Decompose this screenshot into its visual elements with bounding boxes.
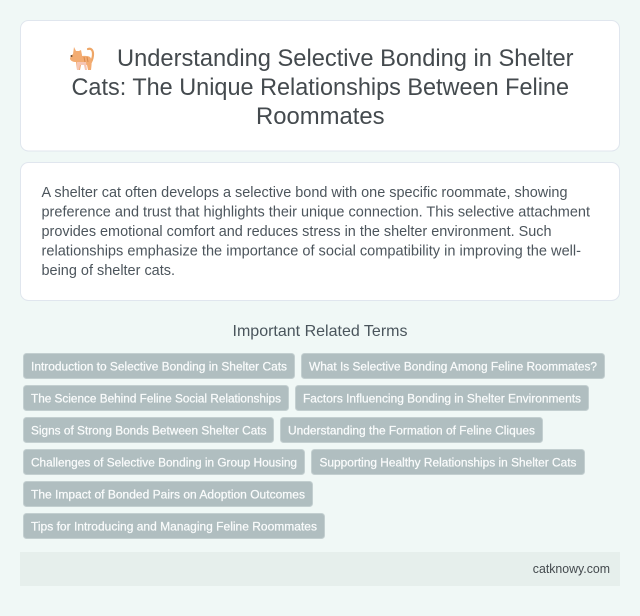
tag: Supporting Healthy Relationships in Shelter Cats xyxy=(320,456,576,470)
panel: summary card xyxy=(20,162,620,300)
tag: Understanding the Formation of Feline Cliques xyxy=(288,424,535,438)
tag: Factors Influencing Bonding in Shelter Environments xyxy=(303,392,581,406)
title text: Roommates xyxy=(256,103,384,130)
heading: related terms: Important Related Terms xyxy=(232,323,408,340)
icon: cat xyxy=(70,47,93,70)
tag xyxy=(24,418,274,442)
tag: What Is Selective Bonding Among Feline Roommates? xyxy=(309,360,597,374)
tag: The Impact of Bonded Pairs on Adoption Outcomes xyxy=(31,488,305,502)
tag xyxy=(296,386,588,410)
panel: title card xyxy=(20,20,620,151)
summary paragraph: A shelter cat often develops a selective bond with one specific roommate, showing xyxy=(42,185,568,201)
tag xyxy=(280,418,542,442)
summary paragraph: being of shelter cats. xyxy=(42,263,175,279)
tag xyxy=(24,450,304,474)
tag xyxy=(24,482,312,506)
title text: Understanding Selective Bonding in Shelter xyxy=(117,45,574,72)
tag xyxy=(312,450,584,474)
tag xyxy=(302,354,604,378)
title text: Cats: The Unique Relationships Between Feline xyxy=(72,74,569,101)
tag: Introduction to Selective Bonding in Shelter Cats xyxy=(31,360,287,374)
tag list xyxy=(24,354,604,538)
tag: The Science Behind Feline Social Relationships xyxy=(31,392,281,406)
summary paragraph xyxy=(42,185,590,279)
tag xyxy=(24,514,324,538)
summary paragraph: relationships emphasize the importance of social compatibility in improving the well- xyxy=(42,244,581,260)
title text xyxy=(72,45,574,130)
tag: Signs of Strong Bonds Between Shelter Cats xyxy=(31,424,266,438)
tag xyxy=(24,386,288,410)
tag: Challenges of Selective Bonding in Group Housing xyxy=(31,456,297,470)
summary paragraph: preference and trust that highlights their unique connection. This selective attachment xyxy=(42,204,590,220)
tag: Tips for Introducing and Managing Feline Roommates xyxy=(31,520,317,534)
summary paragraph: provides emotional comfort and reduces stress in the shelter environment. Such xyxy=(42,224,552,240)
tag xyxy=(24,354,294,378)
footer bar: catknowy.com xyxy=(533,561,610,576)
footer bar xyxy=(20,552,620,586)
